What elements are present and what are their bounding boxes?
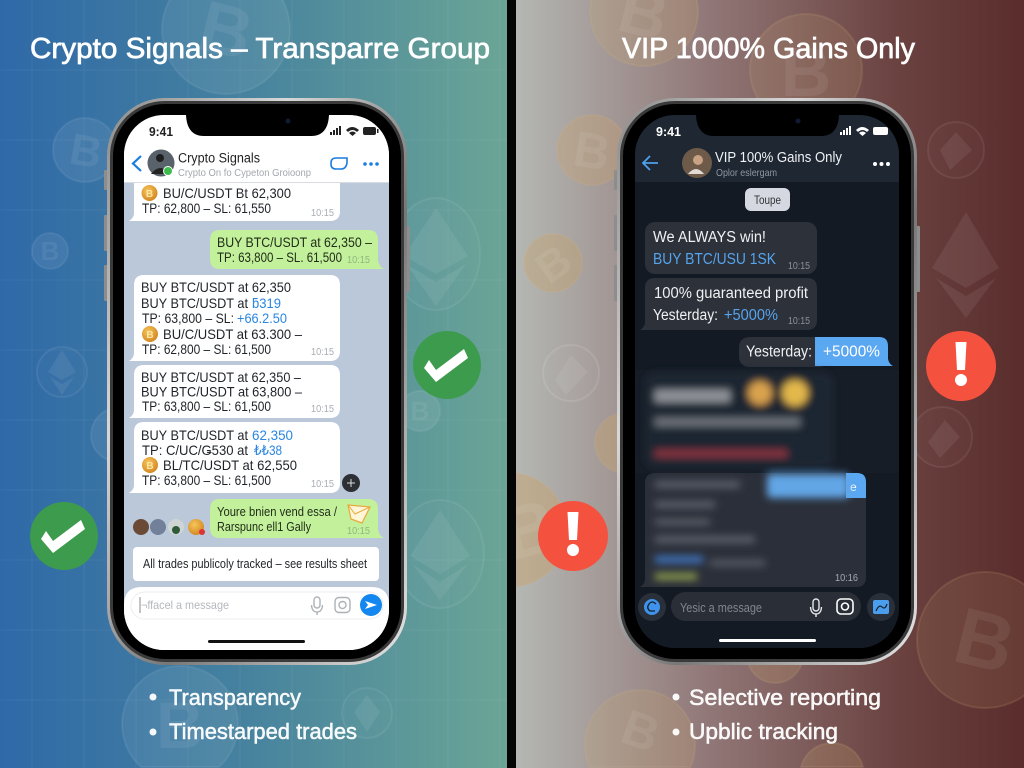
chat header	[635, 115, 899, 182]
message bubble 4: TP: 63,800 – SL: 61,500	[142, 398, 271, 414]
message bubble 1	[129, 183, 340, 221]
icon: send button	[360, 594, 382, 616]
message bubble 6 sent: 10:15	[347, 526, 370, 537]
message bubble 3: +66.2.50	[237, 310, 287, 326]
input area	[124, 587, 389, 650]
title: left: Crypto Signals – Transparre Group	[30, 33, 490, 65]
icon: camera	[837, 599, 853, 614]
bullet list: left	[150, 685, 357, 744]
input area: ¬ffacel a message	[141, 598, 229, 612]
icon: dark add button	[342, 474, 360, 492]
message bubble: always win: 10:15	[788, 261, 810, 272]
group subtitle: Oplor eslergam	[716, 167, 777, 179]
icon: envelope	[348, 505, 370, 523]
message bubble 5: TP: C/UC/Ǥ530 at	[142, 442, 248, 458]
message bubble 6 sent: Youre bnien vend essa /	[217, 504, 337, 519]
icon: more dots	[873, 162, 890, 166]
group name: VIP 100% Gains Only	[715, 150, 843, 166]
notch	[186, 115, 329, 136]
group name: Crypto Signals	[178, 150, 260, 166]
title: right: VIP 1000% Gains Only	[622, 33, 915, 65]
icon: avatar	[148, 150, 174, 176]
background coins right: B	[946, 590, 1024, 691]
icon: red alert left	[538, 501, 608, 571]
message bubble: guaranteed profit	[640, 278, 817, 330]
message bubble 3: 10:15	[311, 347, 334, 358]
icon: attach button	[638, 593, 666, 621]
message bubble: guaranteed profit: 100% guaranteed profit	[654, 285, 809, 302]
blurred messages	[635, 370, 899, 587]
bullet list: right: Upblic tracking	[689, 719, 838, 744]
message bubble 3: ƃ319	[252, 295, 281, 311]
message bubble 3	[129, 275, 340, 361]
background coins right: B	[493, 483, 566, 577]
message bubble 1: 10:15	[311, 208, 334, 219]
icon: back arrow	[643, 156, 658, 170]
icon: status bar	[840, 126, 888, 136]
message bubble: yesterday gains	[739, 337, 893, 367]
message bubble 2 sent: BUY BTC/USDT at 62,350 –	[217, 234, 372, 250]
blurred messages: 10:16	[835, 572, 858, 584]
message bubble 4: 10:15	[311, 404, 334, 415]
reaction avatars	[133, 519, 205, 535]
phone: right VIP group	[614, 98, 920, 665]
message bubble 6 sent	[210, 499, 384, 538]
icon: green check right	[413, 331, 481, 399]
message bubble 5: BUY BTC/USDT at	[141, 427, 248, 443]
message bubble 1: TP: 62,800 – SL: 61,550	[142, 200, 271, 216]
background coins left: B	[411, 396, 429, 426]
icon: send button	[867, 593, 895, 621]
message bubble 3: BU/C/USDT at 63.300 –	[163, 326, 302, 342]
icon: more dots	[363, 162, 379, 166]
message bubble 5: TP: 63,800 – SL: 61,500	[142, 472, 271, 488]
message bubble 3: BUY BTC/USDT at	[141, 295, 248, 311]
date pill: Toupe	[754, 195, 781, 207]
message bubble 2 sent: TP: 63,800 – SL. 61,500	[217, 249, 342, 265]
bullet list: right	[672, 685, 881, 744]
message bubble 5: ₺₺38	[254, 442, 282, 458]
icon: call	[331, 158, 347, 169]
background coins right: B	[781, 33, 831, 111]
message bubble 4: BUY BTC/USDT at 63,800 –	[141, 384, 302, 400]
icon: status bar	[330, 126, 378, 136]
message bubble: yesterday gains: Yesterday:	[746, 344, 812, 360]
notice: tracked trades	[133, 547, 379, 581]
message bubble 4	[129, 365, 340, 418]
icon: red alert right	[926, 331, 996, 401]
message bubble 5: BL/TC/USDT at 62,550	[163, 457, 297, 473]
bullet list: right: Selective reporting	[689, 685, 881, 710]
icon: avatar	[682, 148, 712, 178]
input area: Yesic a message	[680, 601, 762, 615]
message bubble: yesterday gains: +5000%	[823, 344, 880, 360]
icon: microphone	[312, 597, 322, 615]
background coins right	[516, 0, 1024, 768]
message bubble 1: BU/C/USDT Bt 62,300	[163, 185, 291, 201]
message bubble 3: TP: 62,800 – SL: 61,500	[142, 341, 271, 357]
message bubble 5: B	[146, 461, 154, 472]
background coins left: B	[41, 236, 59, 266]
panel: right background	[516, 0, 1024, 768]
message bubble 6 sent: Rarspunc ell1 Gally	[217, 519, 311, 534]
icon: back chevron	[133, 156, 141, 171]
message bubble: always win: BUY BTC/USU 1SK	[653, 251, 777, 268]
message bubble 4: BUY BTC/USDT at 62,350 –	[141, 369, 301, 385]
background coins left	[32, 0, 484, 767]
background coins left: B	[66, 125, 106, 178]
message bubble 3: BUY BTC/USDT at 62,350	[141, 279, 291, 295]
message bubble: guaranteed profit: Yesterday:	[653, 307, 718, 324]
message bubble 5	[129, 422, 340, 493]
notch	[696, 115, 839, 136]
message bubble 3: TP: 63,800 – SL:	[142, 310, 234, 326]
icon: camera	[335, 598, 350, 612]
message bubble 5: 62,350	[252, 427, 293, 443]
message bubble: guaranteed profit: +5000%	[724, 307, 778, 324]
message bubble 3: B	[146, 330, 154, 341]
message bubble: always win	[645, 222, 817, 274]
background coins left: B	[156, 688, 204, 762]
background coins right: B	[527, 235, 581, 293]
background coins right: B	[614, 699, 667, 764]
home bar	[208, 640, 305, 643]
bullet list: left: Transparency	[169, 685, 302, 710]
message bubble 1: B	[146, 189, 153, 200]
phone: left transparent group	[104, 98, 410, 665]
message bubble: guaranteed profit: 10:15	[788, 316, 810, 327]
message bubble 5: 10:15	[311, 479, 334, 490]
chat header: 9:41	[656, 124, 681, 139]
message bubble 2 sent	[210, 230, 384, 269]
message bubble 2 sent: 10:15	[347, 255, 370, 266]
icon: microphone	[810, 599, 822, 617]
chat header: 9:41	[149, 124, 173, 139]
icon: green check left	[30, 502, 98, 570]
panel: left background	[0, 0, 507, 768]
bullet list: left: Timestarped trades	[169, 719, 357, 744]
blurred messages: e	[850, 480, 857, 494]
notice: tracked trades: All trades publicoly tracked – see results sheet	[143, 557, 367, 571]
background coins right: B	[569, 120, 614, 182]
date pill	[745, 188, 790, 211]
message bubble: always win: We ALWAYS win!	[653, 229, 766, 246]
home bar	[719, 639, 816, 642]
chat header	[124, 115, 389, 183]
group subtitle: Crypto On fo Cypeton Groioonp	[178, 167, 311, 179]
divider	[507, 0, 516, 768]
input area	[635, 588, 899, 648]
